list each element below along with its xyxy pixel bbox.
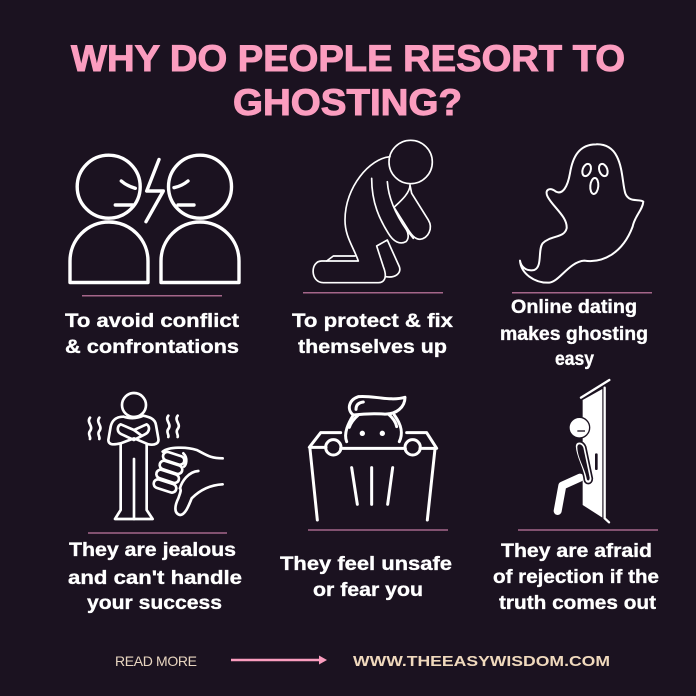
caption: To protect & fix [292,310,453,332]
caption [493,540,659,614]
panel: online dating [500,144,652,370]
caption: your success [87,592,222,614]
title: GHOSTING? [233,82,462,123]
caption: To avoid conflict [65,310,240,332]
caption: They are afraid [501,540,652,562]
caption: of rejection if the [493,566,659,588]
caption: truth comes out [499,592,657,614]
panel: protect and fix [292,140,453,358]
panel: afraid of rejection [493,380,659,614]
title: WHY DO PEOPLE RESORT TO [71,38,625,79]
read more label: READ MORE [115,653,197,669]
panel: avoid conflict [65,155,240,358]
arrow [231,656,327,664]
panel: unsafe [280,396,452,601]
caption: Online dating [511,296,637,318]
caption: or fear you [313,579,423,601]
footer [115,653,610,670]
caption: They are jealous [69,539,236,561]
caption [65,310,240,358]
icon: person walking through door [558,380,609,522]
icon: kneeling person [313,140,432,283]
icon: jealous person and thumbs down [89,393,223,519]
title [71,38,625,123]
caption [500,296,648,370]
website: WWW.THEEASYWISDOM.COM [353,653,610,670]
icon: ghost [520,144,643,283]
caption: They feel unsafe [280,553,452,575]
caption [280,553,452,601]
caption: easy [555,348,594,370]
icon: person hiding in bin [309,396,437,520]
caption: makes ghosting [500,323,648,345]
icon: two arguing people [70,155,239,282]
caption [68,539,242,614]
caption: themselves up [298,336,447,358]
caption: & confrontations [65,336,239,358]
caption [292,310,453,358]
caption: and can't handle [68,567,242,589]
panel: jealous [68,393,242,614]
